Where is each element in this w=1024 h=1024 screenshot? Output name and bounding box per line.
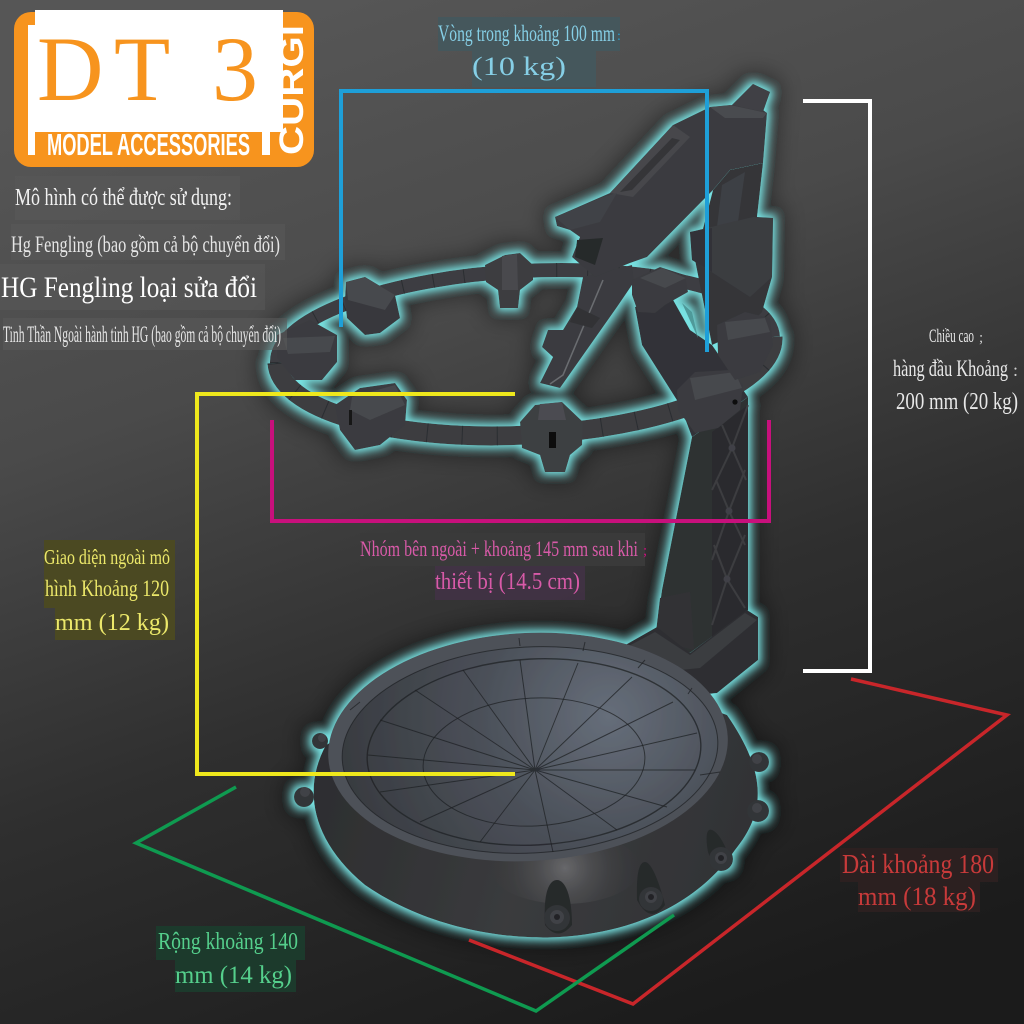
dimension: interface bracket (yellow) (197, 394, 515, 774)
ring node: front left (335, 383, 407, 450)
side box (690, 217, 773, 297)
stand model with glow (277, 84, 773, 937)
label: height: Chiều cao (929, 326, 974, 347)
ring node: back left (345, 277, 400, 335)
compatibility list (0, 176, 287, 350)
ring node: far right (717, 312, 773, 380)
dome highlight (490, 832, 640, 904)
label: length: mm (18 kg) (858, 882, 976, 911)
pylon strut (635, 298, 748, 437)
label: model interface: mm (12 kg) (55, 610, 169, 636)
dimension: width bracket (green) (136, 787, 674, 1011)
logo: MODEL ACCESSORIES (47, 127, 250, 162)
logo (14, 10, 314, 167)
label: outer group: thiết bị (14.5 cm) (435, 569, 580, 595)
ring node: top (485, 253, 533, 308)
dome body (314, 640, 758, 937)
label: outer group: ; (643, 543, 647, 559)
label: inner ring: (10 kg) (472, 52, 566, 81)
base block (600, 610, 758, 705)
ring node: far left cluster (277, 320, 337, 380)
compatibility list: Mô hình có thể được sử dụng: (15, 185, 232, 211)
ring node: bottom (520, 402, 583, 472)
label: height (893, 326, 1018, 415)
dimension: outer group bracket (magenta) (272, 420, 769, 521)
label: height: : (1013, 360, 1018, 380)
upper arm (555, 84, 770, 277)
label: model interface: hình Khoảng 120 (45, 576, 169, 601)
label: model interface (44, 540, 175, 640)
label: length: Dài khoảng 180 (842, 849, 994, 879)
ring back half (277, 270, 773, 363)
label: model interface: Giao diện ngoài mô (44, 545, 170, 569)
rear column (695, 163, 773, 345)
pylon column (655, 397, 748, 653)
label: width (156, 926, 305, 992)
ring node: right (677, 370, 743, 433)
lower jaw of arm (540, 265, 634, 388)
label: width: mm (14 kg) (175, 962, 292, 989)
ring front half (277, 337, 773, 436)
label: inner ring (438, 17, 621, 87)
label: outer group (360, 533, 647, 600)
compatibility list: Tinh Thần Ngoài hành tinh HG (bao gồm cả bộ chuyển đổi) (3, 322, 281, 347)
compatibility list: HG Fengling loại sửa đổi (1, 271, 257, 304)
ring node: back right (632, 267, 688, 313)
compatibility list: Hg Fengling (bao gồm cả bộ chuyển đổi) (11, 232, 280, 257)
label: length (840, 848, 998, 912)
mounting lugs (294, 733, 769, 934)
logo: CURGI (273, 25, 311, 155)
dome bowl (337, 637, 723, 863)
dimension: height bracket (white) (803, 101, 870, 671)
label: inner ring: : (617, 29, 621, 44)
dome rim (322, 623, 734, 871)
label: inner ring: Vòng trong khoảng 100 mm (438, 21, 615, 46)
label: width: Rộng khoảng 140 (158, 929, 298, 955)
label: height: ; (979, 330, 983, 346)
label: outer group: Nhóm bên ngoài + khoảng 145 mm sau khi (360, 536, 638, 561)
dimension: length bracket (red) (469, 679, 1007, 1004)
logo: DT 3 (37, 18, 258, 120)
dimension: inner ring bracket (blue) (341, 91, 707, 352)
